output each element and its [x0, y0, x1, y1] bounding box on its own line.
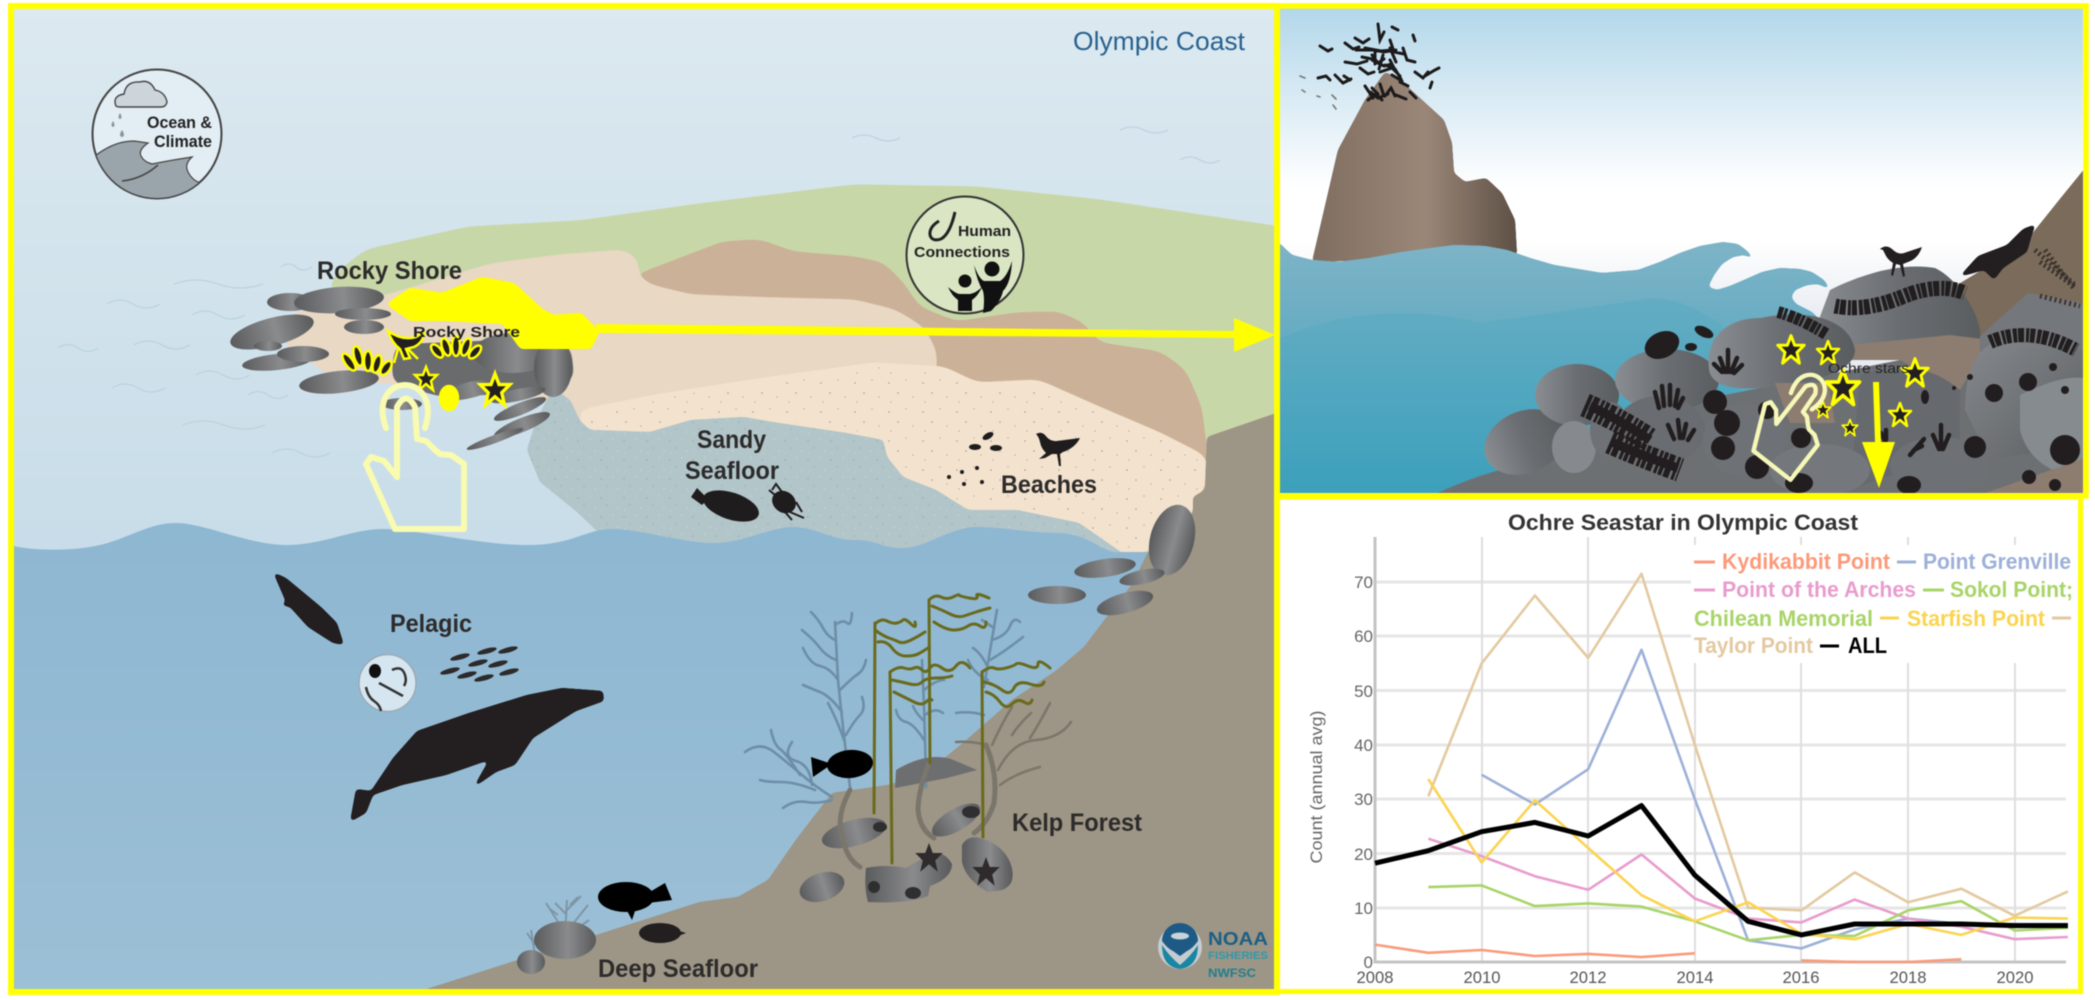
- ocean wave: [1276, 240, 1831, 500]
- lighter foreground swell: [1280, 298, 1800, 493]
- icon: bird footprints and shells: [947, 430, 1002, 486]
- logo: NOAA Fisheries NWFSC: NWFSC: [1208, 966, 1256, 980]
- icon: pointing hand: [366, 385, 464, 529]
- ocean water: [13, 522, 1148, 990]
- y axis tick labels: 50: [1354, 682, 1373, 701]
- ochre seastars highlighted: [1778, 336, 1928, 436]
- y axis tick labels: 0: [1364, 953, 1373, 972]
- y axis tick labels: [1354, 573, 1373, 972]
- label: Deep Seafloor: Deep Seafloor: [598, 955, 758, 983]
- icon: kelp rockfish: [811, 748, 874, 780]
- series: Sokol Point / Chilean Memorial: [1428, 885, 2068, 940]
- logo: NOAA Fisheries NWFSC: [1158, 923, 1268, 980]
- label: Sandy Seafloor: Seafloor: [685, 457, 779, 485]
- x axis tick labels: 2016: [1782, 968, 1820, 987]
- kelp holdfast branches on land: [840, 703, 1071, 867]
- icon: plankton badge: [359, 654, 416, 712]
- chart legend: Chilean Memorial: [1694, 606, 1873, 631]
- map scene clipped to panel: [14, 8, 1300, 1000]
- grid lines: [1375, 537, 2066, 962]
- x axis tick labels: 2018: [1890, 968, 1926, 987]
- label: Ochre stars: Ochre stars: [1828, 360, 1909, 376]
- logo: NOAA Fisheries NWFSC: NOAA: [1208, 929, 1268, 949]
- label: Rocky Shore overlay: Rocky Shore: [413, 324, 520, 341]
- icon: Human Connections badge: Connections: [914, 244, 1010, 261]
- beach: [576, 363, 1207, 552]
- black seaweed and mussels: [1585, 250, 2080, 470]
- chart legend: Taylor Point: [1694, 633, 1814, 658]
- panel border: [11, 6, 1277, 992]
- x axis tick labels: 2020: [1996, 968, 2034, 987]
- chart legend: Starfish Point: [1907, 606, 2046, 631]
- icon: deep sea rockfish: [598, 882, 672, 920]
- icon: Ocean and Climate badge: Ocean &: [147, 113, 212, 132]
- series: Starfish Point: [1428, 779, 2068, 939]
- panel: rocky shore detail scene: [1276, 6, 2090, 500]
- icon: Ocean and Climate badge: [90, 70, 222, 210]
- icon: crab: [768, 484, 804, 520]
- sea surface ripples: [58, 127, 1220, 457]
- icon: Human Connections badge: Human: [958, 223, 1011, 240]
- label: Olympic Coast: Olympic Coast: [1073, 26, 1246, 56]
- rocky shore species icons: [340, 331, 510, 410]
- panel border: [1278, 497, 2080, 992]
- seabird flock: [1300, 24, 1439, 109]
- series: Taylor Point: [1428, 574, 2068, 916]
- chart legend: ALL: [1848, 633, 1887, 658]
- deep seafloor coral and rocks: [517, 896, 596, 974]
- x axis tick labels: 2010: [1464, 968, 1500, 987]
- axes: [1375, 537, 2066, 962]
- y axis tick labels: 60: [1354, 627, 1373, 646]
- x axis tick labels: 2012: [1570, 968, 1606, 987]
- y axis title: Count (annual avg): [1307, 710, 1326, 864]
- rocky shore rocks: [227, 284, 574, 453]
- label: Sandy Seafloor: Sandy: [697, 426, 766, 454]
- y axis tick labels: 70: [1354, 573, 1373, 592]
- series: ALL: [1375, 806, 2068, 935]
- seafloor speckle texture: [532, 402, 1084, 544]
- scene clipped to panel: [1276, 8, 2090, 500]
- icon: deep flatfish: [639, 923, 686, 943]
- yellow arrow down to chart: [1862, 382, 1895, 488]
- sea stack: [1312, 72, 1517, 262]
- icon: humpback whale: [350, 688, 604, 822]
- x axis tick labels: [1356, 968, 2034, 987]
- series: Point Grenville: [1482, 650, 2068, 948]
- chart legend: Point of the Arches: [1722, 577, 1916, 602]
- x axis tick labels: 2014: [1676, 968, 1714, 987]
- panel: Ochre Seastar line chart: [1278, 497, 2080, 992]
- right brown headland: [1957, 168, 2090, 500]
- y axis tick labels: 40: [1354, 736, 1373, 755]
- chart legend: Sokol Point;: [1950, 577, 2073, 602]
- chart legend: Point Grenville: [1923, 549, 2071, 574]
- data series lines: [1375, 574, 2068, 962]
- shoreline rocks: [1028, 504, 1196, 616]
- chart legend: Kydikabbit Point: [1722, 549, 1891, 574]
- giant kelp stalks and fronds: [874, 594, 1050, 863]
- icon: shorebird: [1036, 433, 1080, 466]
- tan cliffs: [636, 240, 1207, 500]
- icon: sea lion: [1959, 224, 2036, 280]
- label: Kelp Forest: Kelp Forest: [1012, 809, 1143, 837]
- sandy seafloor: [527, 394, 1121, 552]
- icon: fish school: [440, 645, 519, 683]
- sky: [1280, 8, 2083, 493]
- grey boulder mass: [1433, 267, 2090, 496]
- label: Beaches: Beaches: [1001, 471, 1097, 499]
- label: Rocky Shore: Rocky Shore: [317, 257, 462, 285]
- panel border: [1277, 6, 2086, 496]
- label: Pelagic: Pelagic: [390, 610, 472, 638]
- series: Kydikabbit Point: [1375, 945, 1961, 962]
- logo: NOAA Fisheries NWFSC: FISHERIES: [1208, 950, 1268, 962]
- icon: Human Connections badge: [906, 196, 1024, 314]
- y axis tick labels: 20: [1354, 845, 1373, 864]
- yellow arrow to detail panel: [596, 318, 1275, 352]
- chart background: [1280, 499, 2078, 989]
- label: Sandy Seafloor: [685, 429, 780, 480]
- series: Point of the Arches: [1428, 839, 2068, 939]
- icon: tilted pointing hand: [1738, 362, 1851, 480]
- chart legend: [1694, 549, 2073, 658]
- icon: Ocean and Climate badge: Climate: [154, 132, 212, 151]
- y axis tick labels: 10: [1354, 899, 1373, 918]
- highlighted yellow rocky shore area: [391, 280, 596, 346]
- sky background: [14, 8, 1276, 553]
- beige bluff: [285, 250, 936, 420]
- green headland: [326, 185, 1300, 560]
- icon: perched bird: [1880, 246, 1922, 277]
- icon: small whale: [273, 572, 344, 645]
- y axis tick labels: 30: [1354, 790, 1373, 809]
- icon: flatfish: [690, 488, 760, 522]
- x axis tick labels: 2008: [1356, 968, 1394, 987]
- legend backdrop: [1691, 545, 2078, 663]
- grey seabed land: [427, 414, 1274, 990]
- chart title: Ochre Seastar in Olympic Coast: [1508, 510, 1859, 535]
- beach sand dots: [582, 367, 1203, 548]
- panel: Olympic Coast ecosystem map: [11, 6, 1300, 1000]
- kelp forest: branching algae: [745, 610, 1023, 808]
- kelp rocks and seastars: [796, 757, 1013, 907]
